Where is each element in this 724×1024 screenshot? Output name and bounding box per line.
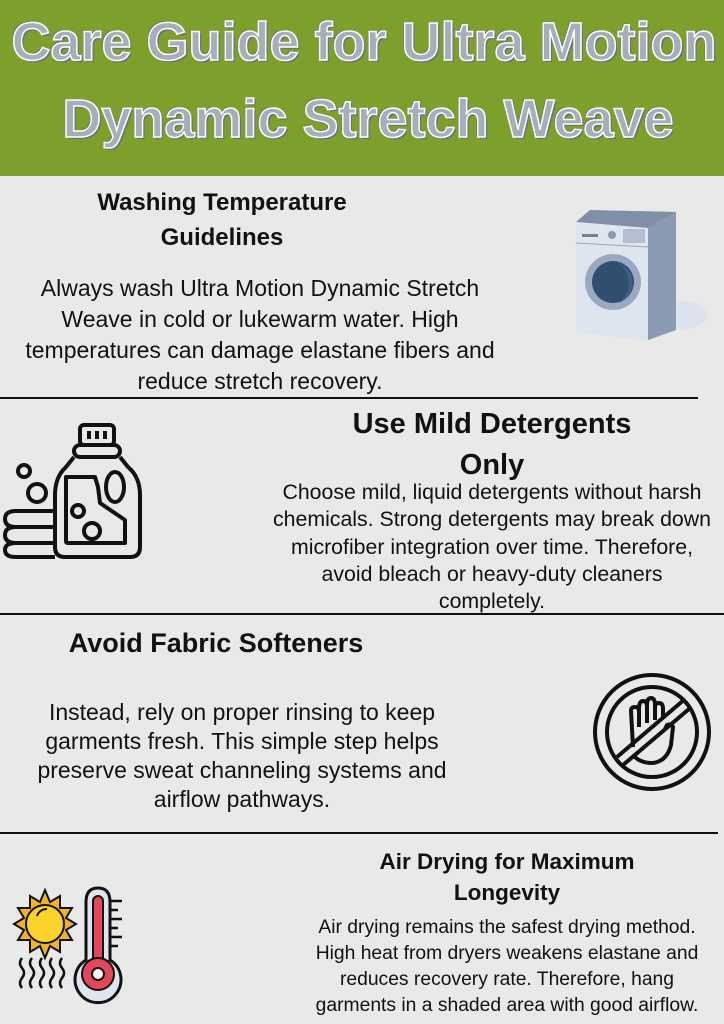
icon: detergent bottle	[3, 423, 142, 559]
section 2 text	[273, 480, 711, 613]
section 3 text: Instead, rely on proper rinsing to keep	[49, 699, 435, 725]
section 1 text	[25, 275, 495, 394]
section 4 heading	[379, 849, 635, 905]
section 4 text: Air drying remains the safest drying method.	[318, 917, 696, 938]
section 3 text	[37, 699, 447, 812]
section 2 text: microfiber integration over time. Therefore,	[291, 535, 693, 559]
section 1 heading	[97, 189, 347, 251]
section 3 text: garments fresh. This simple step helps	[45, 728, 439, 754]
section 2 heading: Use Mild Detergents	[353, 408, 631, 440]
section 2 text: chemicals. Strong detergents may break down	[273, 507, 711, 531]
section 3 text: preserve sweat channeling systems and	[37, 757, 447, 783]
section 2 heading: Only	[460, 449, 524, 481]
icon: no hand	[593, 673, 711, 791]
section 4 text: reduces recovery rate. Therefore, hang	[340, 969, 674, 990]
icon: sun and thermometer	[12, 886, 123, 1004]
section 2 heading	[353, 408, 631, 481]
section 1 text: Always wash Ultra Motion Dynamic Stretch	[41, 275, 479, 301]
section 4 heading: Air Drying for Maximum	[379, 849, 635, 874]
section 1 heading: Washing Temperature	[97, 189, 347, 216]
title banner: Dynamic Stretch Weave	[62, 89, 674, 149]
section 4 text: High heat from dryers weakens elastane and	[316, 943, 698, 964]
section 1 text: reduce stretch recovery.	[137, 368, 382, 394]
section 3 heading: Avoid Fabric Softeners	[69, 628, 363, 658]
section 3 text: airflow pathways.	[154, 786, 330, 812]
section 1 text: Weave in cold or lukewarm water. High	[61, 306, 459, 332]
section 1 heading: Guidelines	[161, 224, 283, 251]
section 4 text: garments in a shaded area with good airflow.	[316, 995, 698, 1016]
title banner: Care Guide for Ultra Motion	[11, 12, 717, 72]
section 2 text: completely.	[439, 589, 545, 613]
section 4 heading: Longevity	[454, 880, 560, 905]
icon: washing machine	[576, 210, 707, 340]
section 2 text: Choose mild, liquid detergents without harsh	[282, 480, 702, 504]
section 2 text: avoid bleach or heavy-duty cleaners	[322, 562, 662, 586]
title banner	[0, 0, 724, 176]
section 4 text	[316, 917, 698, 1016]
section 1 text: temperatures can damage elastane fibers and	[25, 337, 495, 363]
